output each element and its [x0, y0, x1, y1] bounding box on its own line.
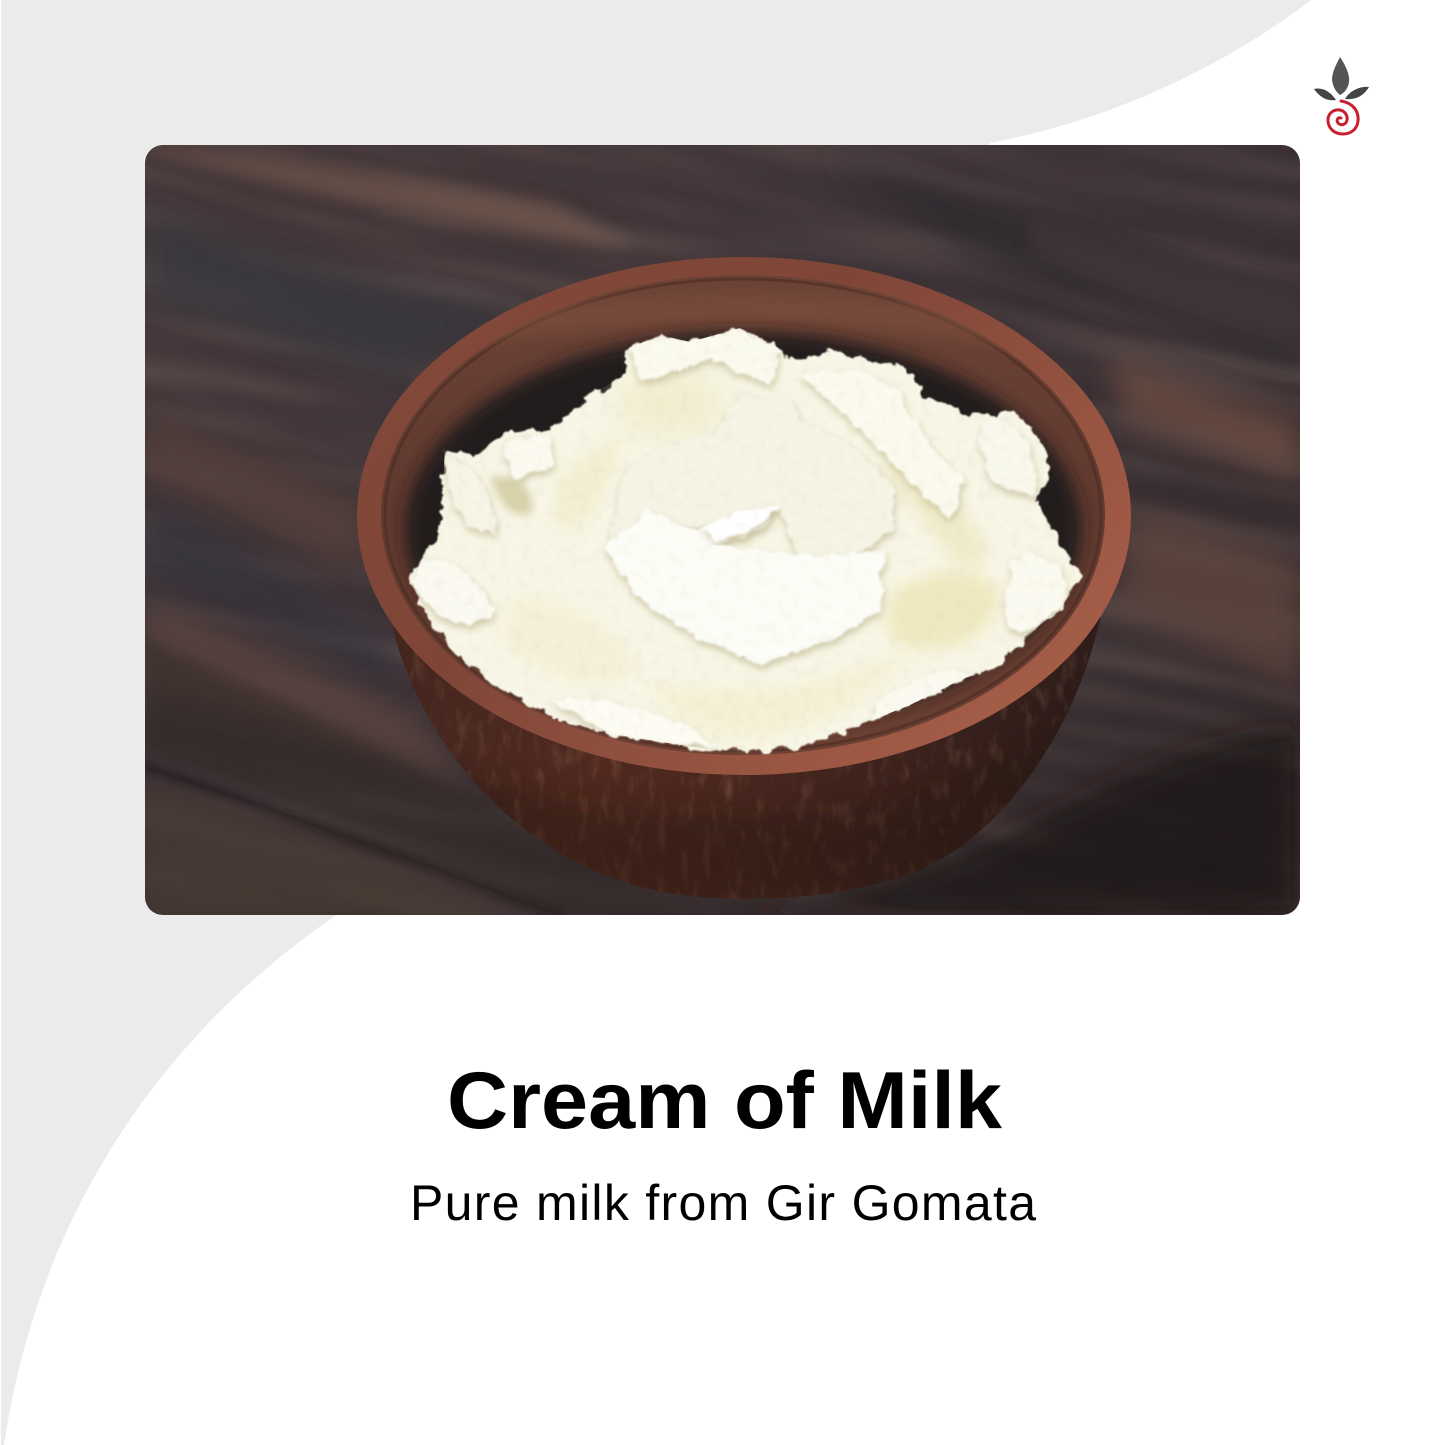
icon: top leaf: [1332, 57, 1349, 95]
upper centre lobe: [610, 395, 895, 560]
bowl rim: [357, 257, 1131, 775]
bowl outer body: [391, 617, 1100, 899]
icon: right leaf: [1345, 87, 1369, 99]
icon: left leaf: [1314, 88, 1336, 100]
title: Cream of Milk: [447, 1056, 1003, 1146]
left flakes: [410, 559, 495, 624]
bowl inner wall: [381, 275, 1105, 755]
logo: leaves and red spiral: [1314, 57, 1369, 134]
icon: red spiral: [1328, 101, 1358, 134]
bottom flakes: [550, 698, 720, 745]
wooden table: [145, 145, 1300, 915]
bowl shadow: [700, 730, 1300, 915]
cream shading and swirls: [400, 320, 1100, 760]
photo: bowl of cream on wooden table: [145, 145, 1300, 915]
lower central swoosh: [600, 505, 885, 665]
right flakes: [979, 420, 1036, 496]
cream base: [408, 328, 1082, 754]
subtitle: Pure milk from Gir Gomata: [410, 1175, 1036, 1231]
upper right lobe: [800, 372, 965, 520]
small crest: [700, 505, 780, 540]
